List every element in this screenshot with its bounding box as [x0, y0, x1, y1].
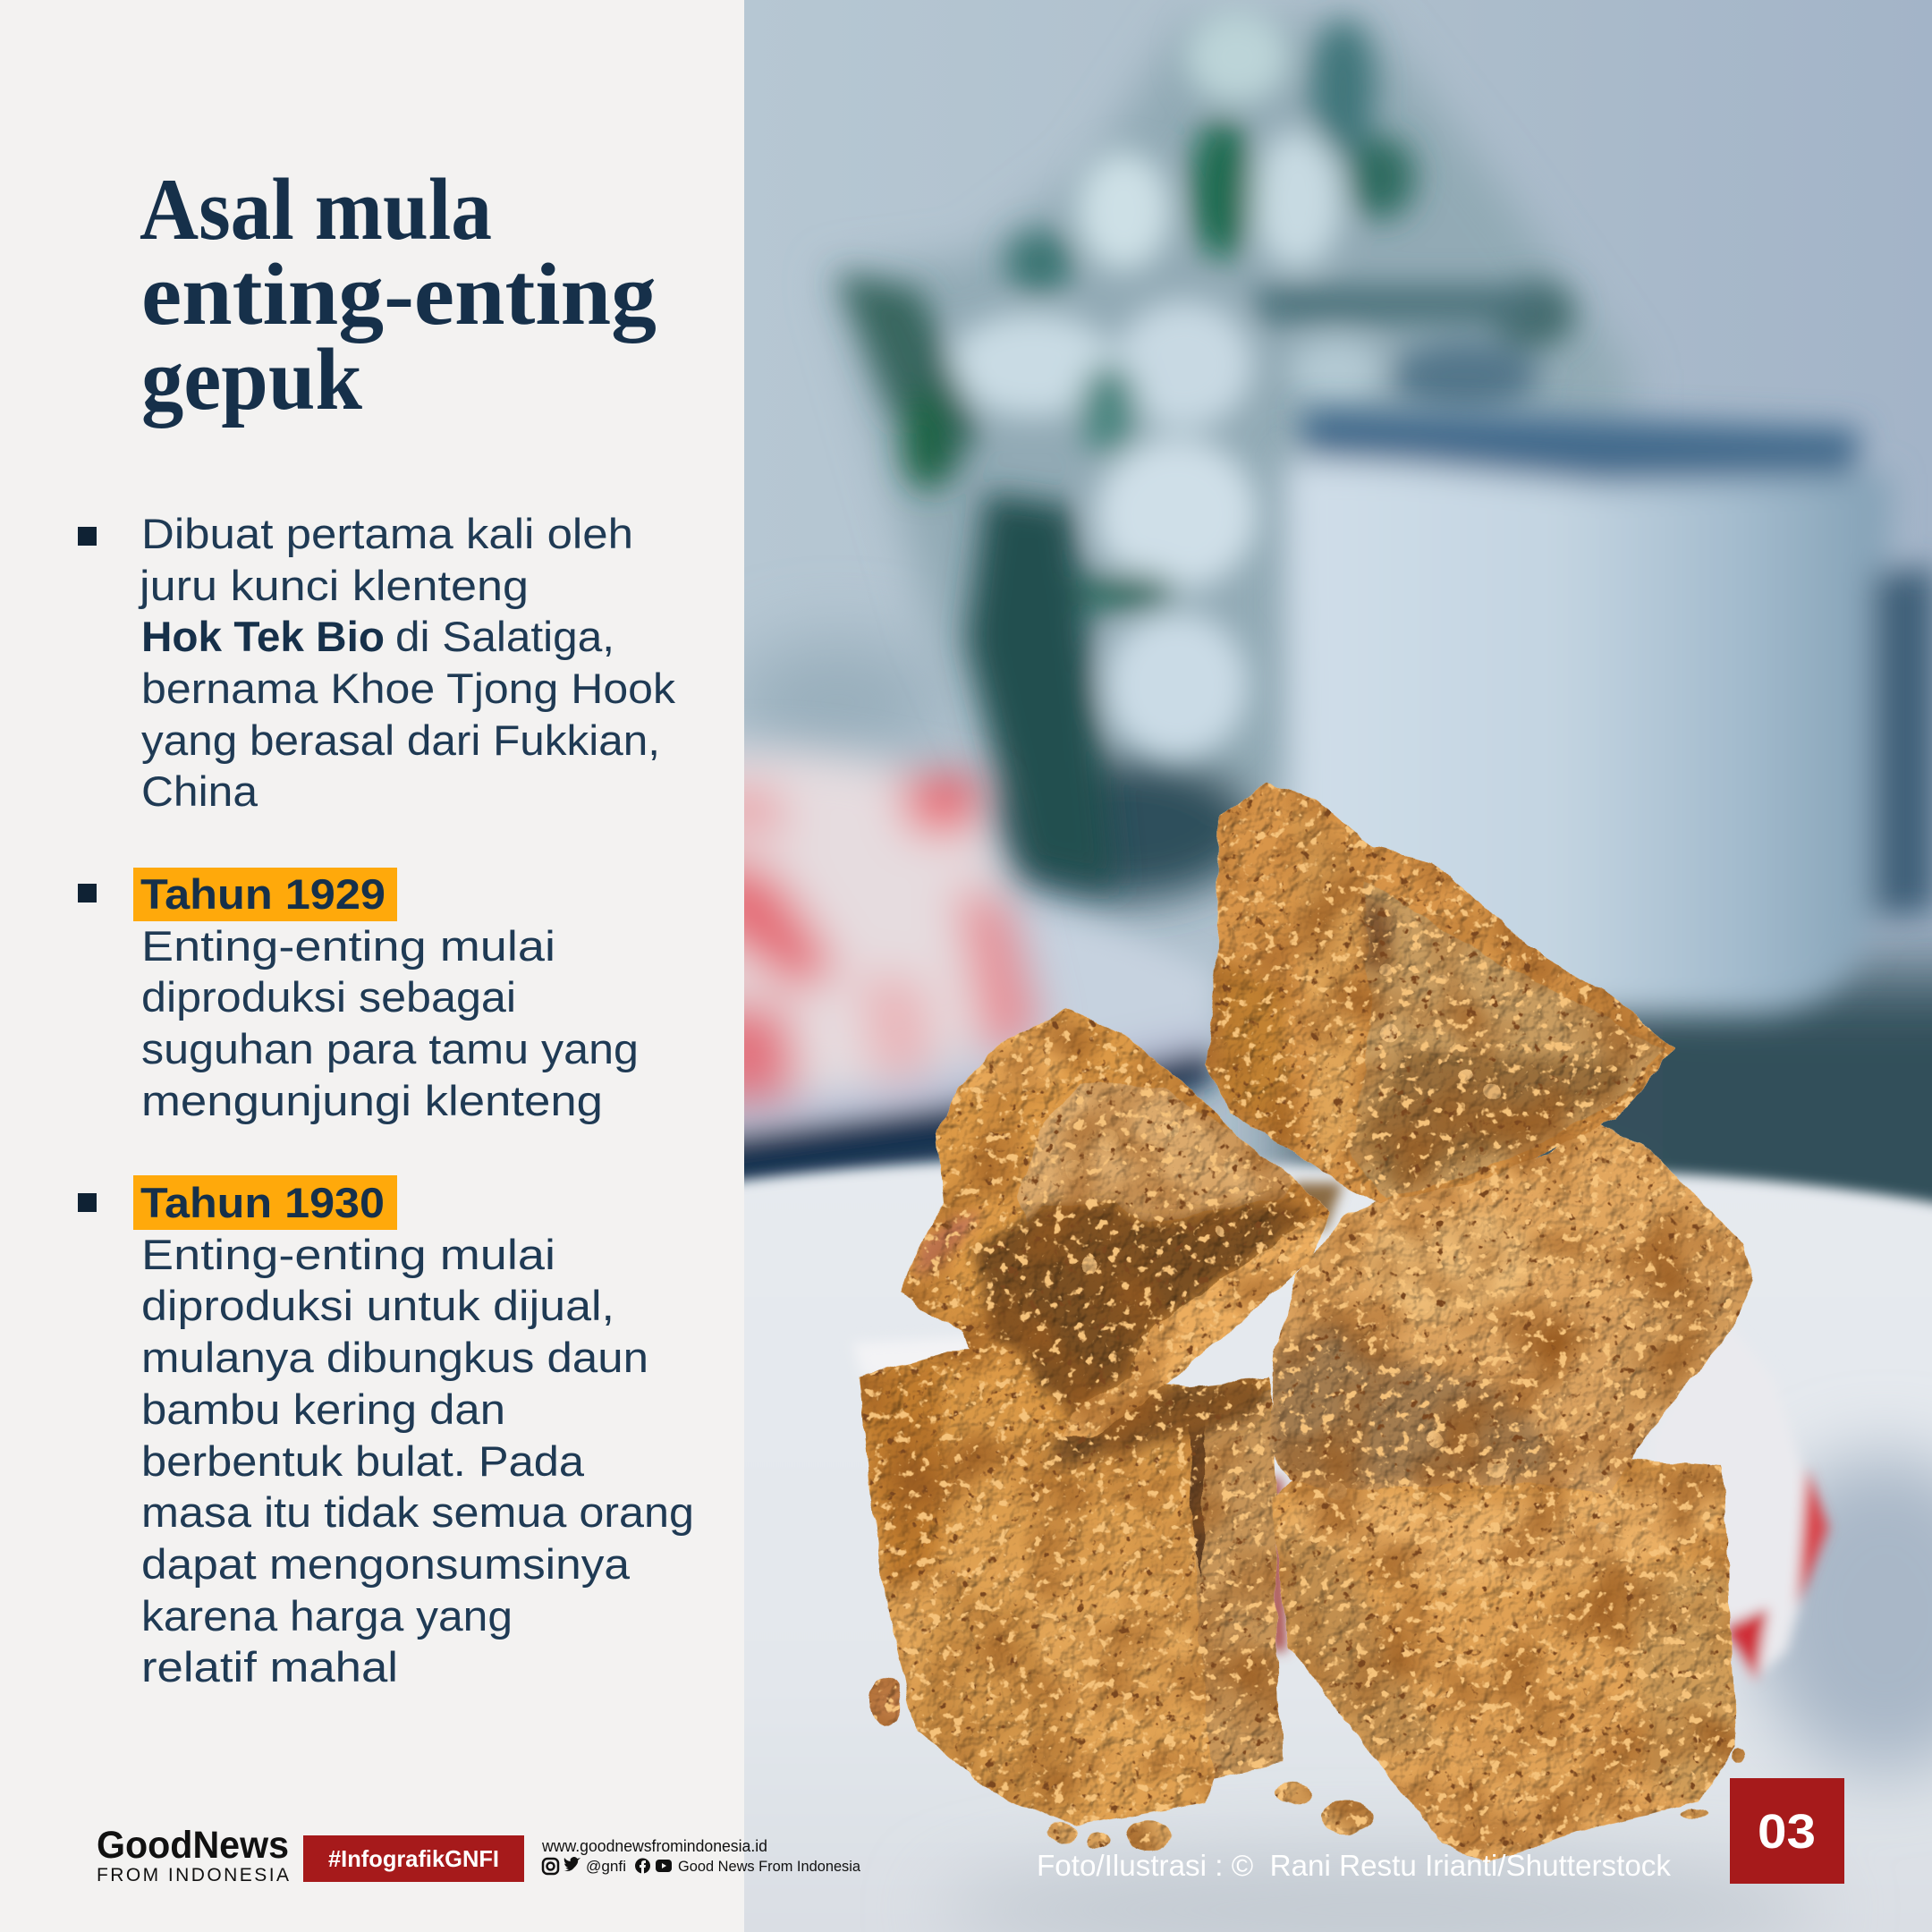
bullet two: year 1929 — [78, 868, 639, 1124]
blurred plant leaves and white flowers — [838, 10, 1575, 887]
icon: instagram — [543, 1859, 558, 1874]
social handle: @gnfi — [586, 1858, 626, 1875]
panel: left text column — [78, 161, 694, 1690]
text block: 1929: suguhan para tamu yang — [141, 1025, 639, 1072]
text block: 1930: masa itu tidak semua orang — [141, 1488, 694, 1536]
blurred dark table and background — [727, 640, 1932, 1269]
cookies stack — [838, 764, 1775, 1873]
logo: GoodNews From Indonesia: GoodNews — [97, 1824, 289, 1867]
text block: 1929: mengunjungi klenteng — [141, 1077, 603, 1124]
icon: twitter — [564, 1857, 580, 1871]
hashtag badge — [303, 1835, 524, 1882]
text block: 1930: diproduksi untuk dijual, — [141, 1282, 614, 1329]
larger crumbs on cut faces — [1066, 962, 1608, 1534]
bullet marker — [78, 884, 97, 902]
website address: www.goodnewsfromindonesia.id — [541, 1837, 767, 1855]
heading: Tahun 1929: Tahun 1929 — [140, 870, 386, 918]
bullet three: year 1930 — [78, 1175, 694, 1690]
hashtag badge: #InfografikGNFI — [328, 1845, 499, 1872]
text block: first maker — [138, 510, 676, 815]
icon: youtube — [656, 1860, 672, 1872]
blurred plate behind with navy rim — [690, 890, 1214, 1198]
text block: first maker: Dibuat pertama kali oleh — [141, 510, 633, 557]
text block: 1929: diproduksi sebagai — [141, 973, 516, 1021]
logo: GoodNews From Indonesia: FROM INDONESIA — [97, 1865, 289, 1885]
photo credit: Foto/Ilustrasi : © Rani Restu Irianti/Shutterstock — [1037, 1849, 1671, 1882]
cookie: bottom left — [838, 1331, 1306, 1848]
social name: Good News From Indonesia — [678, 1858, 861, 1875]
text block: 1930 — [141, 1231, 694, 1690]
cookie: bottom right — [1257, 1442, 1750, 1873]
icon: facebook — [635, 1859, 650, 1874]
photo background wall — [744, 0, 1932, 1171]
bullet marker — [78, 527, 97, 546]
text block: 1930: bambu kering dan — [141, 1385, 505, 1433]
text block: 1929: Enting-enting mulai — [141, 922, 555, 970]
blurred red and white wrapper — [690, 751, 1041, 1103]
blurred white mug — [1290, 409, 1932, 1016]
bullet marker — [78, 1193, 97, 1212]
crumpled wrapper behind cookies — [852, 1318, 1828, 1682]
highlight: Tahun 1930 — [133, 1175, 397, 1230]
text block: 1930: dapat mengonsumsinya — [141, 1540, 631, 1588]
title: Asal mula — [140, 161, 492, 258]
highlight: Tahun 1929 — [133, 868, 397, 921]
text block: 1930: karena harga yang — [141, 1592, 513, 1640]
panel: left text background — [0, 0, 744, 1932]
plate shadows — [936, 1454, 1932, 1932]
cookie: top triangle — [1195, 764, 1688, 1220]
text block: first maker: China — [141, 767, 258, 815]
title: gepuk — [141, 331, 362, 428]
text block: first maker: bernama Khoe Tjong Hook — [141, 665, 676, 712]
page number badge — [1730, 1778, 1844, 1884]
text block: 1930: Enting-enting mulai — [141, 1231, 555, 1278]
title: enting-enting — [141, 246, 657, 343]
white plate — [665, 1160, 1932, 1932]
text block: first maker: yang berasal dari Fukkian, — [141, 716, 660, 764]
text block: first maker: Hok Tek Bio — [141, 613, 385, 660]
text block: 1930: berbentuk bulat. Pada — [141, 1437, 585, 1485]
crumbs on plate — [870, 1675, 1746, 1852]
title — [140, 161, 657, 428]
blurred teapot silhouette — [828, 23, 1631, 901]
text block: 1930: mulanya dibungkus daun — [141, 1334, 648, 1381]
text block: first maker: di Salatiga, — [395, 613, 614, 660]
footer: branding — [97, 1824, 861, 1885]
text block: first maker: juru kunci klenteng — [138, 562, 529, 609]
text block: 1930: relatif mahal — [141, 1643, 398, 1690]
cookie: middle right — [1257, 1109, 1775, 1504]
photo: enting-enting gepuk on plate — [665, 0, 1932, 1932]
logo: GoodNews From Indonesia — [97, 1824, 289, 1885]
text block: 1929 — [141, 922, 639, 1124]
cookie: tilted left — [887, 998, 1343, 1454]
bullet one: first maker — [78, 510, 676, 815]
heading: Tahun 1930: Tahun 1930 — [140, 1179, 385, 1226]
dark shadow filling between cookies — [1267, 1182, 1343, 1651]
page number badge: 03 — [1758, 1805, 1816, 1859]
